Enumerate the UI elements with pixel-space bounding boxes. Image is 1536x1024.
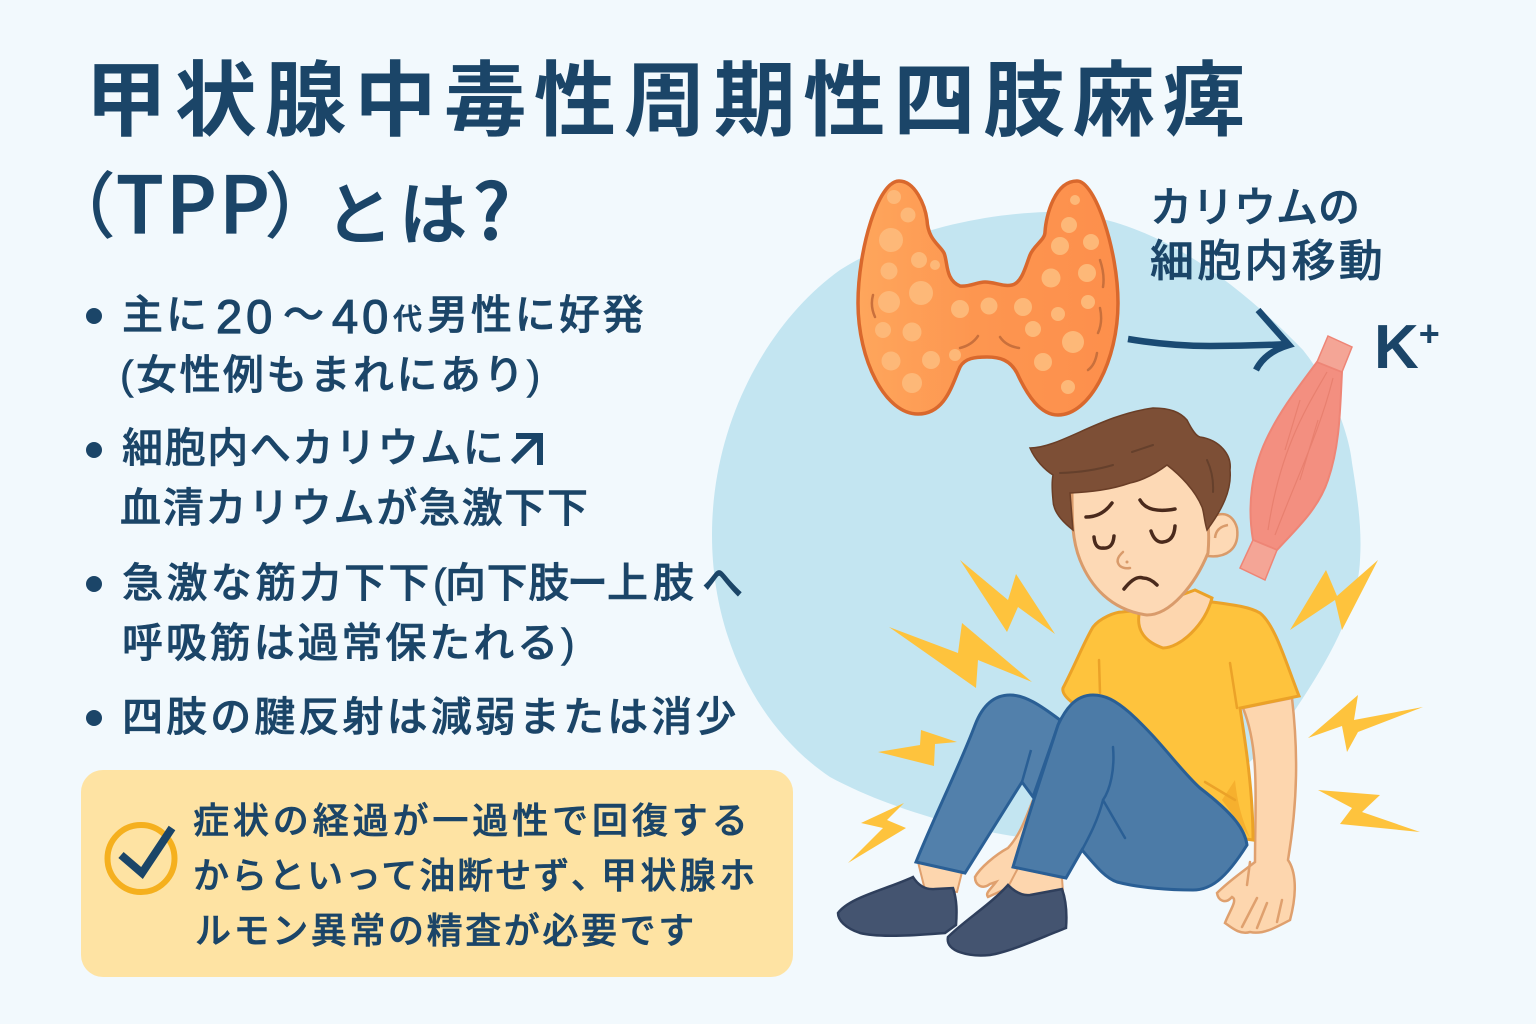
subtitle: ） <box>264 148 336 253</box>
bullet 1 <box>86 290 646 398</box>
bullet 2: 細胞内へカリウムに <box>122 425 505 471</box>
bullet 3: へ <box>702 560 743 606</box>
callout text: 症状の経過が一過性で回復する <box>193 800 752 841</box>
back leg <box>916 695 1060 873</box>
icon: muscle <box>1240 336 1352 580</box>
icon: up-right arrow <box>510 433 543 465</box>
right arm and hand <box>1217 698 1296 933</box>
bullet 3: 向下肢 <box>445 560 570 606</box>
lightning bolts <box>848 560 1423 863</box>
bullet 2 <box>86 425 590 531</box>
bullet 3: ( <box>433 560 447 606</box>
neck <box>1139 590 1212 648</box>
callout text: からといって油断せず <box>193 855 571 896</box>
label: potassium movement: カリウムの <box>1150 184 1360 231</box>
bullet 1: 40 <box>332 290 392 343</box>
label: K+: K+ <box>1374 313 1440 382</box>
callout text: 、 <box>571 855 607 896</box>
shirt <box>1063 602 1299 840</box>
subtitle <box>44 144 516 261</box>
subtitle: とは? <box>325 151 516 261</box>
text: （ <box>44 148 116 253</box>
icon: check mark <box>104 822 178 895</box>
callout <box>81 770 793 977</box>
hair <box>1030 408 1230 530</box>
front leg <box>1013 695 1247 890</box>
shoes <box>838 877 957 936</box>
bullet 1: (女性例もまれにあり) <box>120 352 543 398</box>
back hand <box>975 800 1033 897</box>
eyes, brows, mouth <box>1086 500 1175 589</box>
icon: thyroid gland <box>858 181 1118 415</box>
callout text: ルモン異常の精査が必要です <box>195 910 697 951</box>
bullet 3: 急激な筋力下下 <box>122 560 433 606</box>
ankles <box>918 862 1063 897</box>
person sitting <box>838 408 1299 955</box>
callout text: 甲状腺ホ <box>601 855 759 896</box>
face <box>1072 455 1209 615</box>
bullet 1: 代 <box>393 304 422 336</box>
bullet 3: 上肢 <box>607 560 699 606</box>
label: potassium movement <box>1150 184 1386 286</box>
callout text <box>193 800 759 951</box>
bullet 3: 呼吸筋は過常保たれる) <box>122 620 578 666</box>
arrow: potassium movement <box>1128 310 1289 370</box>
bullet 1: ～ <box>283 292 324 338</box>
bullet 1: 男性に好発 <box>427 292 646 338</box>
bullet 2: 血清カリウムが急激下下 <box>120 485 590 531</box>
bullet 1: 20 <box>216 290 276 343</box>
bullet 4: 四肢の腱反射は減弱または消少 <box>122 694 739 740</box>
bullet 3: ー <box>567 560 608 606</box>
pale blue circle <box>712 212 1361 840</box>
label: potassium movement: 細胞内移動 <box>1150 237 1386 286</box>
title: 甲状腺中毒性周期性四肢麻痺 <box>85 56 1252 147</box>
ear <box>1205 514 1237 556</box>
subtitle: TPP <box>116 144 272 256</box>
bullet 1: 主に <box>122 292 210 338</box>
bullet 3 <box>86 560 743 666</box>
